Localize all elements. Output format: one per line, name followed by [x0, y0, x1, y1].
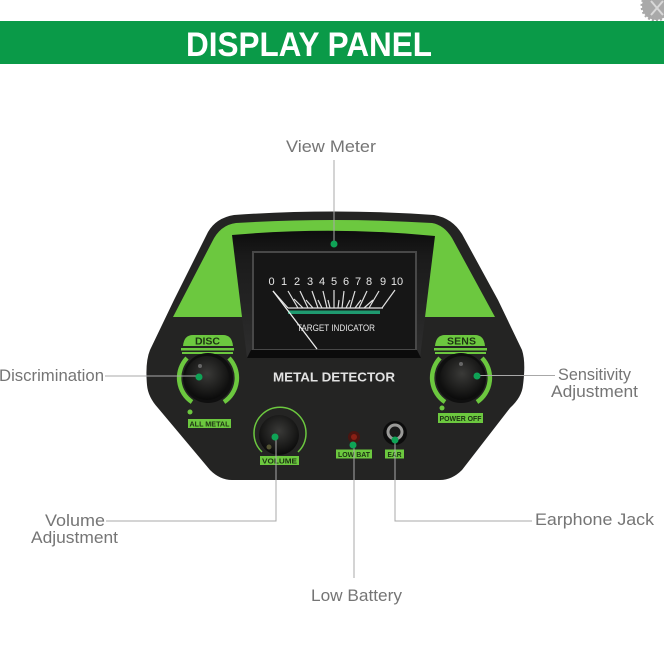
- sens knob: [432, 335, 490, 403]
- meter caption: TARGET INDICATOR: [297, 323, 375, 333]
- header banner: [0, 21, 664, 64]
- brand text: METAL DETECTOR: [273, 370, 395, 384]
- green top plate: [173, 220, 495, 317]
- meter green strip: [288, 310, 380, 314]
- disc knob: DISC: [195, 336, 220, 348]
- meter bezel: [232, 231, 435, 358]
- meter window: 10: [391, 276, 403, 288]
- meter window: 5: [331, 276, 337, 288]
- icon: gear badge: [642, 0, 664, 20]
- volume knob: [254, 407, 306, 466]
- callout: sensitivity adjustment: [474, 366, 638, 401]
- callout: volume adjustment: Volume: [45, 512, 105, 530]
- meter window: 3: [307, 276, 313, 288]
- meter window: 9: [380, 276, 386, 288]
- power off label: POWER OFF: [440, 414, 482, 423]
- meter scale numbers: 0: [268, 276, 275, 288]
- earphone jack: EAR: [388, 450, 402, 459]
- earphone jack: [383, 421, 407, 459]
- callout: sensitivity adjustment: Sensitivity: [558, 366, 632, 384]
- meter window: 2: [294, 276, 300, 288]
- meter window: [253, 252, 416, 350]
- callout: earphone jack: Earphone Jack: [535, 511, 655, 529]
- meter window: 8: [366, 276, 372, 288]
- callout: low battery: [311, 442, 403, 605]
- low battery led: [336, 431, 372, 459]
- meter needle: [273, 291, 317, 349]
- callout: view meter: View Meter: [286, 138, 377, 156]
- callout: volume adjustment: Adjustment: [31, 529, 118, 547]
- callout: discrimination: Discrimination: [0, 367, 104, 385]
- bezel bottom lip: [247, 350, 421, 358]
- all metal label: ALL METAL: [190, 420, 230, 428]
- all metal label: [188, 410, 231, 428]
- meter window: 4: [319, 276, 325, 288]
- callout: sensitivity adjustment: Adjustment: [551, 383, 638, 401]
- meter window: 1: [281, 276, 287, 288]
- low battery led: LOW BAT: [338, 450, 370, 459]
- callout: volume adjustment: [31, 434, 278, 547]
- metal detector control panel: [146, 212, 524, 480]
- callout: view meter: [286, 138, 377, 248]
- sens knob: SENS: [447, 336, 476, 348]
- panel body: [146, 212, 524, 480]
- callout: discrimination: [0, 367, 202, 385]
- title: DISPLAY PANEL: [186, 26, 432, 64]
- volume knob: VOLUME: [262, 456, 297, 466]
- meter ticks: [273, 290, 395, 308]
- callout: earphone jack: [392, 436, 655, 529]
- callout: low battery: Low Battery: [311, 587, 403, 605]
- power off label: [438, 406, 483, 423]
- meter window: 7: [355, 276, 361, 288]
- disc knob: [179, 335, 237, 403]
- meter window: 6: [343, 276, 349, 288]
